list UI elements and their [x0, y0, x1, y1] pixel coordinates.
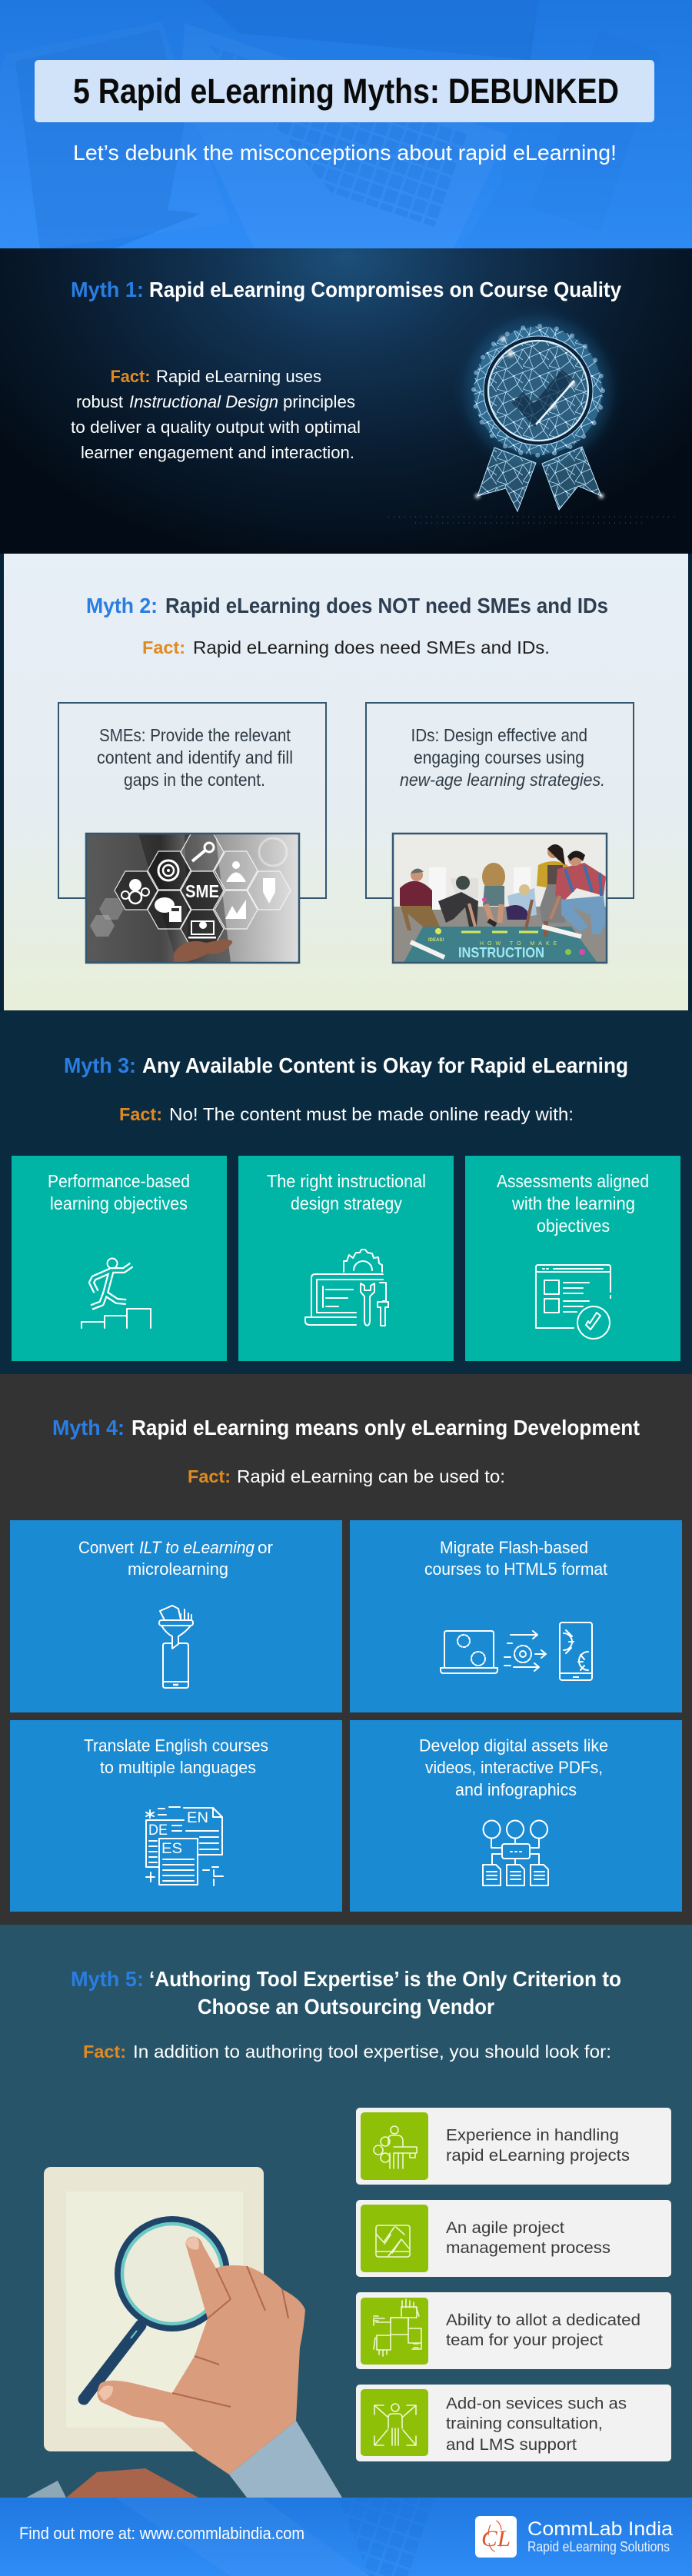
box: IDs: new-age learning strategies.: [400, 770, 605, 790]
heading: myth 5: Myth 5:: [71, 1967, 144, 1991]
card: dedicated team: [356, 2292, 671, 2369]
heading: myth 1: Myth 1:: [71, 278, 144, 301]
footer: [0, 2498, 692, 2576]
box: SMEs: [58, 703, 326, 963]
box: IDs: [366, 703, 634, 963]
footer link text: Find out more at: www.commlabindia.com: [19, 2524, 304, 2543]
person: beanie man: [438, 876, 478, 927]
card: assessments: [465, 1156, 680, 1361]
card: convert ILT: or: [258, 1538, 273, 1557]
fact text: myth 1: robust: [76, 392, 123, 411]
card: experience: rapid eLearning projects: [446, 2146, 630, 2165]
icon: language documents: EN: [187, 1810, 208, 1826]
panel: myth 5: [0, 1925, 692, 2498]
person: woman in yellow cardigan: [537, 844, 567, 937]
icon: assessment window with check: [536, 1265, 610, 1339]
card: translate courses: to multiple languages: [100, 1758, 256, 1777]
card: assessments: objectives: [537, 1216, 610, 1236]
box: IDs: engaging courses using: [414, 747, 584, 767]
card: instructional design strategy: The right instructional: [267, 1171, 426, 1191]
fact text: myth 1: to deliver a quality output with optimal: [71, 418, 361, 437]
panel: myth 4: [0, 1374, 692, 1925]
icon: language documents: ES: [161, 1841, 182, 1857]
heading: myth 2: Myth 2:: [86, 594, 158, 617]
heading: myth 3: Any Available Content is Okay for Rapid eLearning: [142, 1053, 628, 1077]
fact text: myth 1: Fact:: [111, 367, 151, 386]
card: migrate flash: [350, 1520, 682, 1712]
card: translate courses: Translate English courses: [84, 1736, 268, 1755]
icon: language documents: DE: [148, 1822, 168, 1839]
fact text: myth 1: Instructional Design: [129, 392, 278, 411]
logo: CommLab India: CL: [481, 2526, 511, 2551]
heading: myth 5: [71, 1967, 621, 2019]
subtitle: Let’s debunk the misconceptions about rapid eLearning!: [73, 141, 617, 165]
fact text: myth 5: In addition to authoring tool expertise, you should look for:: [133, 2042, 611, 2062]
card: translate courses: [10, 1720, 342, 1912]
panel: myth 2: [0, 554, 692, 1011]
heading: myth 1: Rapid eLearning Compromises on Course Quality: [149, 278, 621, 301]
fact text: myth 2: Fact:: [142, 637, 185, 657]
logo: CommLab India: CommLab India: [527, 2518, 673, 2540]
photo: team around instruction mat: INSTRUCTION: [458, 945, 544, 960]
icon: funnel into phone: [159, 1606, 193, 1688]
photo: team around instruction mat: IDEAS!: [428, 938, 444, 943]
fact text: myth 1: Rapid eLearning uses: [156, 367, 321, 386]
header panel: [0, 0, 692, 248]
card: agile: management process: [446, 2238, 610, 2257]
icon: key person: [374, 2126, 417, 2168]
card: performance-based objectives: [12, 1156, 227, 1361]
logo: CommLab India: Rapid eLearning Solutions: [527, 2539, 670, 2554]
icon: person with arrows: [374, 2404, 416, 2445]
icon: runner climbing steps: [82, 1258, 151, 1328]
icon: laptop with gear and tools: [305, 1250, 388, 1326]
icon: connected documents: [483, 1821, 548, 1885]
icon: laptop to phone migration: [441, 1622, 592, 1680]
icon: language documents: [146, 1807, 223, 1885]
heading: myth 3: Myth 3:: [64, 1053, 136, 1077]
box: SMEs: SMEs: Provide the relevant: [99, 725, 291, 745]
box: SMEs: content and identify and fill: [97, 747, 293, 767]
photo: team around instruction mat: [393, 834, 607, 963]
title: [35, 60, 654, 122]
fact text: myth 1: principles: [283, 392, 355, 411]
heading: myth 5: Choose an Outsourcing Vendor: [198, 1995, 494, 2019]
photo: SME hexagons: SME: [185, 881, 219, 901]
card: dedicated team: Ability to allot a dedicated: [446, 2311, 640, 2329]
card: experience: [356, 2108, 671, 2185]
fact text: myth 1: learner engagement and interaction.: [81, 443, 354, 462]
card: instructional design strategy: [238, 1156, 454, 1361]
heading: myth 4: Myth 4:: [52, 1416, 125, 1439]
fact text: myth 1: [71, 367, 361, 462]
card: digital assets: Develop digital assets like: [419, 1736, 608, 1755]
card: digital assets: videos, interactive PDFs,: [425, 1758, 603, 1777]
panel: myth 1: [0, 248, 692, 554]
heading: myth 5: ‘Authoring Tool Expertise’ is the Only Criterion to: [149, 1967, 621, 1991]
person: bent over man: [506, 884, 537, 929]
card: add-on services: and LMS support: [446, 2435, 577, 2454]
card: instructional design strategy: design strategy: [291, 1193, 402, 1213]
card: digital assets: [350, 1720, 682, 1912]
icon: linked hands: [374, 2299, 421, 2356]
person: crouching man: [400, 868, 440, 930]
photo: SME hexagons: [86, 833, 299, 963]
person: man in plaid shirt: [551, 850, 607, 934]
person: curly hair woman: [482, 863, 505, 925]
fact text: myth 4: Fact:: [188, 1466, 231, 1486]
icon: agile board: [376, 2225, 410, 2257]
logo: CommLab India: [475, 2516, 673, 2558]
card: experience: Experience in handling: [446, 2125, 619, 2144]
fact text: myth 4: Rapid eLearning can be used to:: [237, 1466, 505, 1486]
card: convert ILT: [10, 1520, 342, 1712]
card: add-on services: Add-on sevices such as: [446, 2395, 627, 2413]
heading: myth 4: Rapid eLearning means only eLearning Development: [131, 1416, 640, 1439]
title: 5 Rapid eLearning Myths: DEBUNKED: [73, 72, 619, 111]
fact text: myth 2: Rapid eLearning does need SMEs and IDs.: [193, 637, 550, 657]
card: add-on services: training consultation,: [446, 2415, 603, 2433]
card: migrate flash: Migrate Flash-based: [440, 1538, 588, 1557]
card: performance-based objectives: Performance-based: [48, 1171, 190, 1191]
illustration: hand and magnifier on tablet: [26, 2167, 342, 2498]
card: agile: [356, 2200, 671, 2277]
card: assessments: with the learning: [511, 1193, 635, 1213]
card: convert ILT: Convert: [78, 1538, 134, 1557]
heading: myth 2: Rapid eLearning does NOT need SMEs and IDs: [165, 594, 608, 617]
card: add-on services: [356, 2385, 671, 2461]
panel: myth 3: [0, 1011, 692, 1374]
card: assessments: Assessments aligned: [497, 1171, 649, 1191]
fact text: myth 3: No! The content must be made online ready with:: [169, 1104, 574, 1124]
box: IDs: IDs: Design effective and: [411, 725, 587, 745]
fact text: myth 5: Fact:: [83, 2042, 126, 2062]
photo: team around instruction mat: HOW TO MAKE: [480, 941, 561, 947]
card: agile: An agile project: [446, 2218, 564, 2237]
card: digital assets: and infographics: [455, 1780, 577, 1799]
icon: glowing ribbon badge: [388, 320, 677, 523]
card: dedicated team: team for your project: [446, 2331, 603, 2349]
card: convert ILT: microlearning: [128, 1559, 228, 1579]
box: SMEs: gaps in the content.: [124, 770, 265, 790]
card: migrate flash: courses to HTML5 format: [424, 1559, 607, 1579]
card: convert ILT: ILT to eLearning: [139, 1538, 255, 1557]
card: performance-based objectives: learning objectives: [50, 1193, 188, 1213]
fact text: myth 3: Fact:: [119, 1104, 162, 1124]
